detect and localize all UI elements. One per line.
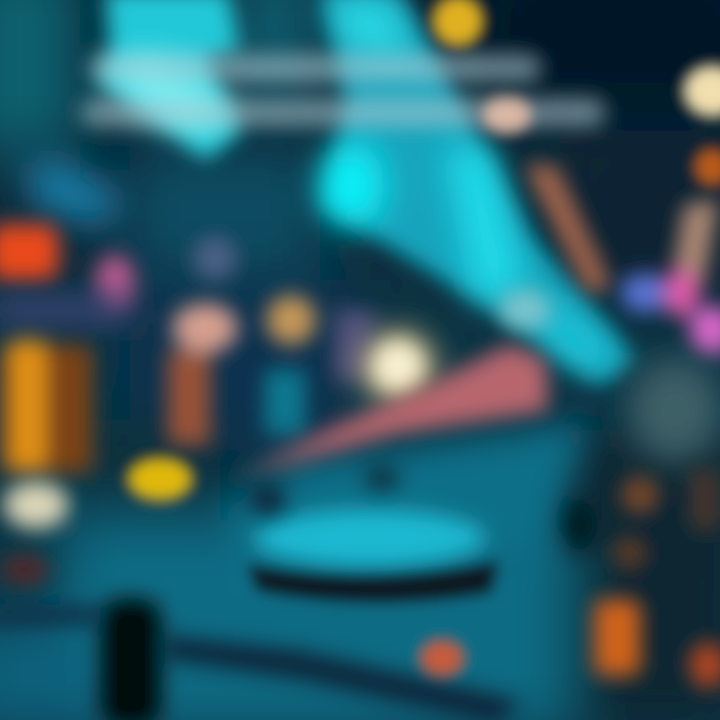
warm glow on headline [483,98,531,132]
red-orange neon sign left [0,225,58,279]
dark horizontal left [0,605,100,625]
red light bottom [420,640,464,676]
orange lights bottom right [595,470,720,687]
orange tower left [0,340,92,473]
white glowing lamp [360,329,436,405]
blue sign left [25,158,122,228]
yellow car light [128,458,192,500]
white light left [4,482,68,528]
dark red glow low left [0,554,51,586]
right figure neon [621,200,720,354]
cyan building left [100,0,240,160]
car dark grille [248,562,498,602]
peach diagonal beam [525,165,610,295]
orange sign right [694,148,720,186]
car bonnet highlight [255,510,485,566]
yellow lamp top [433,0,483,46]
dark post foreground [100,598,162,720]
blurred headline bands [82,55,604,126]
cream lamp right [684,66,720,116]
dark road line [165,635,520,720]
pink sign left [96,255,134,311]
gray right mid [627,358,720,462]
cyan building right [322,0,635,385]
car dark spots [250,464,598,553]
cyan car body [225,420,590,590]
pale tail of cyan building [499,290,551,330]
cyan highlight left [101,42,239,148]
purple band left [0,295,130,325]
pink diagonal road [235,345,548,478]
central street lights [168,236,375,445]
bright cyan highlights [320,0,615,375]
